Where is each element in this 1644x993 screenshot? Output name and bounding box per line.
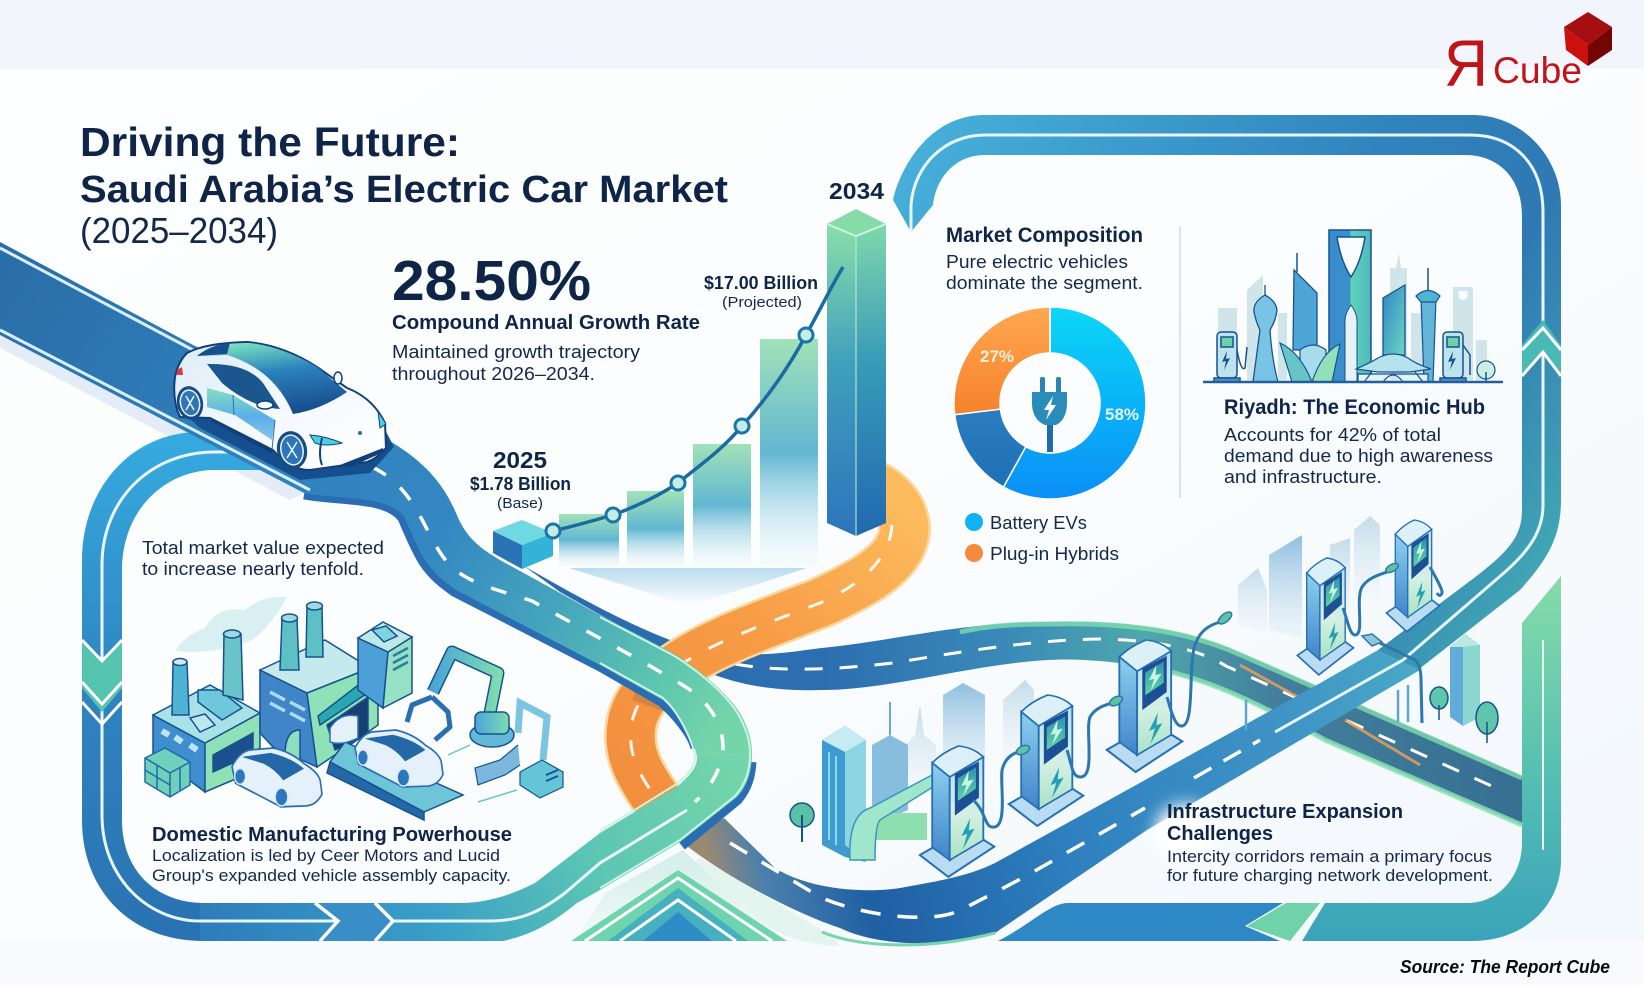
conveyor bbox=[327, 742, 463, 820]
label: base value: $1.78 Billion bbox=[470, 474, 571, 494]
pale background towers bbox=[1218, 253, 1487, 380]
manufacturing text: Group's expanded vehicle assembly capacity. bbox=[152, 866, 511, 885]
chart floor bbox=[569, 568, 807, 606]
label: base value: 2025 bbox=[493, 447, 547, 473]
left spire tower bbox=[1253, 285, 1278, 382]
legend: battery EVs: Battery EVs bbox=[990, 513, 1087, 533]
wave road bbox=[524, 566, 1522, 825]
mini charger right bbox=[1440, 332, 1470, 382]
minaret bbox=[1345, 305, 1357, 382]
CAGR callout: Compound Annual Growth Rate bbox=[392, 312, 700, 334]
donut chart bbox=[954, 307, 1146, 499]
bridge lamp cable bbox=[1362, 634, 1422, 723]
main road shadow bbox=[0, 335, 304, 500]
infrastructure text: Infrastructure Expansion bbox=[1167, 801, 1403, 823]
main road bbox=[0, 242, 752, 941]
right chevrons bbox=[1522, 320, 1561, 376]
segment: battery EVs 58% bbox=[1004, 307, 1146, 499]
label: 2034: 2034 bbox=[829, 178, 884, 204]
orange road bbox=[631, 478, 904, 815]
CAGR callout: Maintained growth trajectory bbox=[392, 342, 640, 362]
bottom-left chevrons bbox=[315, 903, 393, 941]
mirrors bbox=[257, 372, 342, 409]
growth curve bbox=[546, 267, 843, 538]
wheels bbox=[174, 384, 311, 472]
logo: RCube bbox=[1444, 12, 1612, 100]
charger cables bbox=[973, 567, 1442, 827]
charger 2 bbox=[1009, 695, 1083, 826]
lights and grille bbox=[177, 367, 386, 467]
car inside door bbox=[330, 715, 358, 743]
saucer building bbox=[1356, 354, 1431, 382]
lower road and bridge bbox=[683, 650, 1420, 946]
car on conveyor bbox=[355, 730, 443, 787]
car on ground bbox=[232, 748, 322, 807]
manufacturing text bbox=[152, 824, 512, 885]
roof glass bbox=[197, 343, 347, 414]
market composition text bbox=[946, 224, 1143, 293]
right sail bbox=[1383, 285, 1405, 355]
charger 4 bbox=[1297, 558, 1353, 675]
left ring road bbox=[82, 432, 300, 941]
cable plugs bbox=[1015, 561, 1400, 757]
left factory building bbox=[153, 685, 260, 792]
segment: other bbox=[955, 409, 1026, 487]
market composition text: Market Composition bbox=[946, 224, 1143, 247]
title bbox=[80, 119, 728, 251]
charger 5 bbox=[1386, 520, 1439, 632]
chart: market growth bbox=[493, 209, 886, 606]
main chimneys bbox=[280, 602, 323, 670]
Riyadh text: Accounts for 42% of total bbox=[1224, 425, 1441, 445]
label: base value: (Base) bbox=[497, 495, 543, 512]
logo cube bbox=[1564, 12, 1612, 66]
manufacturing text: Localization is led by Ceer Motors and Lucid bbox=[152, 846, 500, 865]
infrastructure text: for future charging network development. bbox=[1167, 866, 1493, 885]
lotus building bbox=[1280, 343, 1340, 382]
bottom centre chevrons bbox=[571, 850, 787, 941]
office tower bbox=[358, 622, 412, 708]
crates bbox=[145, 748, 190, 797]
Riyadh text bbox=[1224, 396, 1493, 487]
title: Saudi Arabia’s Electric Car Market bbox=[80, 169, 728, 211]
road segment: loop to bottom frame bbox=[200, 753, 752, 941]
illustration: city buildings lower bbox=[790, 680, 1034, 862]
label: projected value: (Projected) bbox=[722, 294, 802, 311]
chargers bbox=[920, 520, 1442, 877]
tall bar 2034 bbox=[827, 209, 886, 536]
dashed guide lines bbox=[448, 745, 517, 802]
illustration: factory bbox=[145, 597, 563, 820]
label 58%: 58% bbox=[1105, 405, 1139, 424]
main factory building bbox=[260, 640, 378, 767]
legend: plug-in hybrids: Plug-in Hybrids bbox=[990, 544, 1119, 564]
side windows bbox=[207, 364, 280, 409]
illustration: Riyadh skyline bbox=[1203, 230, 1503, 382]
title: Driving the Future: bbox=[80, 119, 460, 165]
tenfold note: Total market value expected bbox=[142, 538, 384, 558]
Riyadh text: and infrastructure. bbox=[1224, 467, 1382, 487]
CAGR callout bbox=[392, 249, 700, 384]
illustration: city buildings upper bbox=[1238, 516, 1498, 743]
charger 3 bbox=[1107, 640, 1182, 772]
frame road: top and right bbox=[893, 115, 1561, 673]
charger 1 bbox=[920, 746, 994, 877]
infrastructure text bbox=[1167, 801, 1493, 885]
right tower bbox=[1450, 634, 1480, 726]
panel divider bbox=[1179, 226, 1181, 498]
sail building bbox=[1293, 253, 1317, 350]
label 27%: 27% bbox=[980, 347, 1014, 366]
tenfold note bbox=[142, 538, 384, 579]
robot arm large bbox=[407, 652, 514, 747]
bridge pillars bbox=[1246, 685, 1408, 730]
disc tower bbox=[1416, 268, 1440, 382]
label: projected value: $17.00 Billion bbox=[704, 273, 818, 293]
Riyadh text: demand due to high awareness bbox=[1224, 446, 1493, 466]
market composition text: Pure electric vehicles bbox=[946, 252, 1128, 272]
segment: plug-in hybrids 27% bbox=[954, 307, 1050, 415]
tenfold note: to increase nearly tenfold. bbox=[142, 559, 364, 579]
trees bbox=[1430, 687, 1498, 743]
road lip bbox=[304, 495, 752, 846]
kingdom tower bbox=[1329, 230, 1371, 382]
legend bbox=[965, 513, 1119, 564]
title: (2025–2034) bbox=[80, 210, 278, 251]
CAGR callout: 28.50% bbox=[392, 249, 591, 313]
label: projected value bbox=[704, 273, 818, 311]
manufacturing text: Domestic Manufacturing Powerhouse bbox=[152, 824, 512, 846]
infrastructure text: Challenges bbox=[1167, 823, 1273, 845]
Riyadh text: Riyadh: The Economic Hub bbox=[1224, 396, 1485, 419]
icon: plug bbox=[1032, 377, 1067, 452]
ground line bbox=[1203, 381, 1503, 383]
left chimneys bbox=[172, 630, 243, 715]
mini charger left bbox=[1214, 332, 1247, 382]
logo mirrored R: Я bbox=[1444, 26, 1488, 100]
bars bbox=[559, 339, 818, 566]
icon: electric car bbox=[174, 342, 394, 480]
base cube 2025 bbox=[493, 520, 553, 569]
frame road: green lower right bbox=[998, 576, 1561, 941]
CAGR callout: throughout 2026–2034. bbox=[392, 364, 595, 384]
side stripe bbox=[207, 388, 275, 440]
road segment: top left to loop bbox=[0, 242, 752, 757]
tree bbox=[1477, 361, 1495, 382]
left chevrons bbox=[82, 640, 122, 724]
label: base value bbox=[470, 447, 571, 512]
infrastructure text: Intercity corridors remain a primary focus bbox=[1167, 847, 1492, 866]
market composition text: dominate the segment. bbox=[946, 273, 1143, 293]
logo word: Cube bbox=[1493, 50, 1582, 91]
robot arm small bbox=[475, 703, 563, 798]
source: Source: The Report Cube bbox=[1400, 957, 1610, 977]
smoke bbox=[175, 597, 287, 652]
